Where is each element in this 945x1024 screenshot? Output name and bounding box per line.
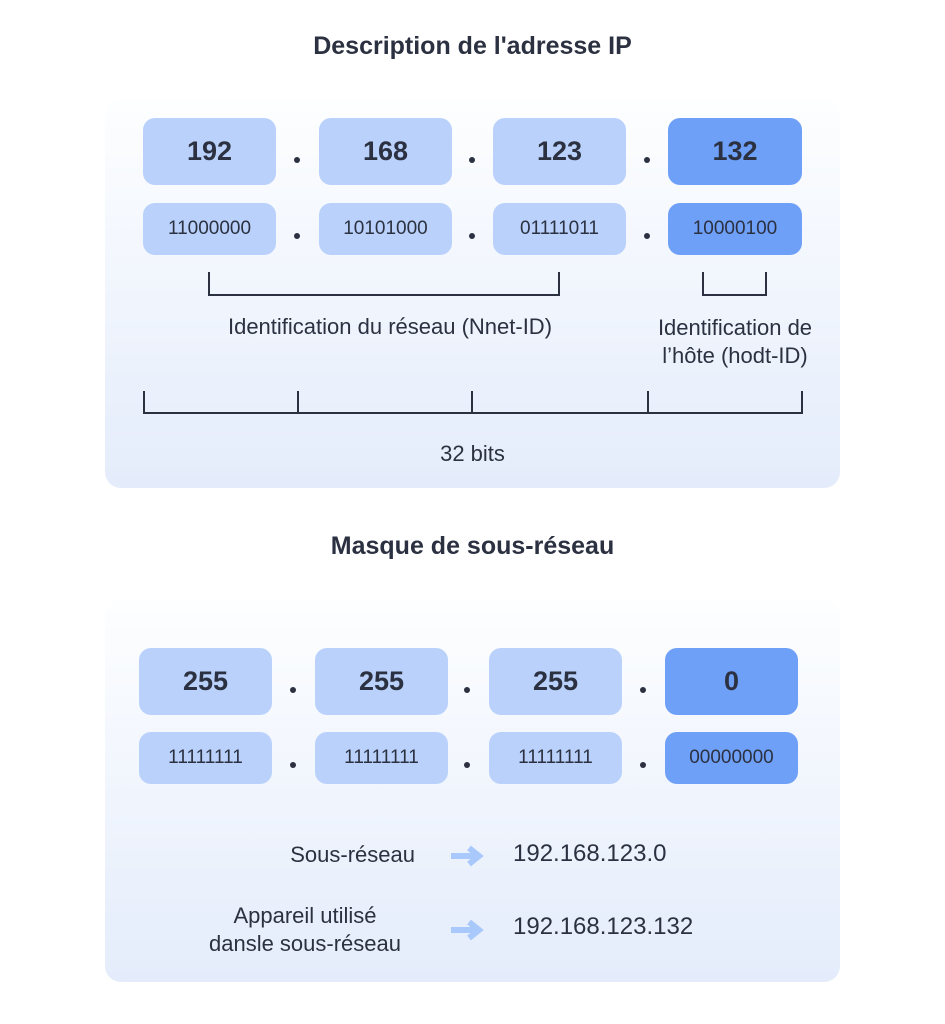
row: device: dansle sous-réseau <box>209 931 401 956</box>
mask octets: 255 <box>183 666 228 696</box>
mask octets <box>139 648 798 784</box>
row: device: 192.168.123.132 <box>513 913 693 940</box>
arrow <box>451 920 484 940</box>
title: subnet mask: Masque de sous-réseau <box>331 532 614 560</box>
row: device: Appareil utilisé <box>233 903 377 928</box>
bracket: host <box>702 272 767 296</box>
mask octets: 11111111 <box>518 747 593 768</box>
decimal octets: 132 <box>712 136 758 166</box>
mask octets: 11111111 <box>344 747 419 768</box>
label: host ID: l’hôte (hodt-ID) <box>662 343 808 368</box>
scale: 32 bits <box>143 391 803 414</box>
mask octets: 00000000 <box>689 747 774 768</box>
row: device <box>209 903 693 956</box>
decimal octets: 192 <box>187 136 232 166</box>
label: host ID: Identification de <box>658 315 812 340</box>
decimal octets: 168 <box>363 136 408 166</box>
decimal octets: 10101000 <box>343 218 428 239</box>
panel: subnet mask <box>105 600 840 982</box>
label: host ID <box>658 315 812 368</box>
bracket: network <box>208 272 560 296</box>
decimal octets: 10000100 <box>693 218 777 239</box>
row: subnet: Sous-réseau <box>290 842 415 867</box>
decimal octets <box>143 118 802 255</box>
decimal octets: 01111011 <box>520 218 599 239</box>
panel: IP address <box>105 100 840 488</box>
mask octets: 0 <box>724 666 739 696</box>
label: network ID: Identification du réseau (Nnet-ID) <box>228 314 552 339</box>
mask octets: 255 <box>359 666 404 696</box>
arrow <box>451 846 484 866</box>
label: 32 bits: 32 bits <box>440 441 505 466</box>
mask octets: 255 <box>533 666 578 696</box>
title: IP address description: Description de l'adresse IP <box>313 32 632 60</box>
row: subnet: 192.168.123.0 <box>513 840 666 867</box>
mask octets: 11111111 <box>168 747 243 768</box>
decimal octets: 123 <box>537 136 582 166</box>
row: subnet <box>290 840 666 867</box>
decimal octets: 11000000 <box>168 218 251 239</box>
